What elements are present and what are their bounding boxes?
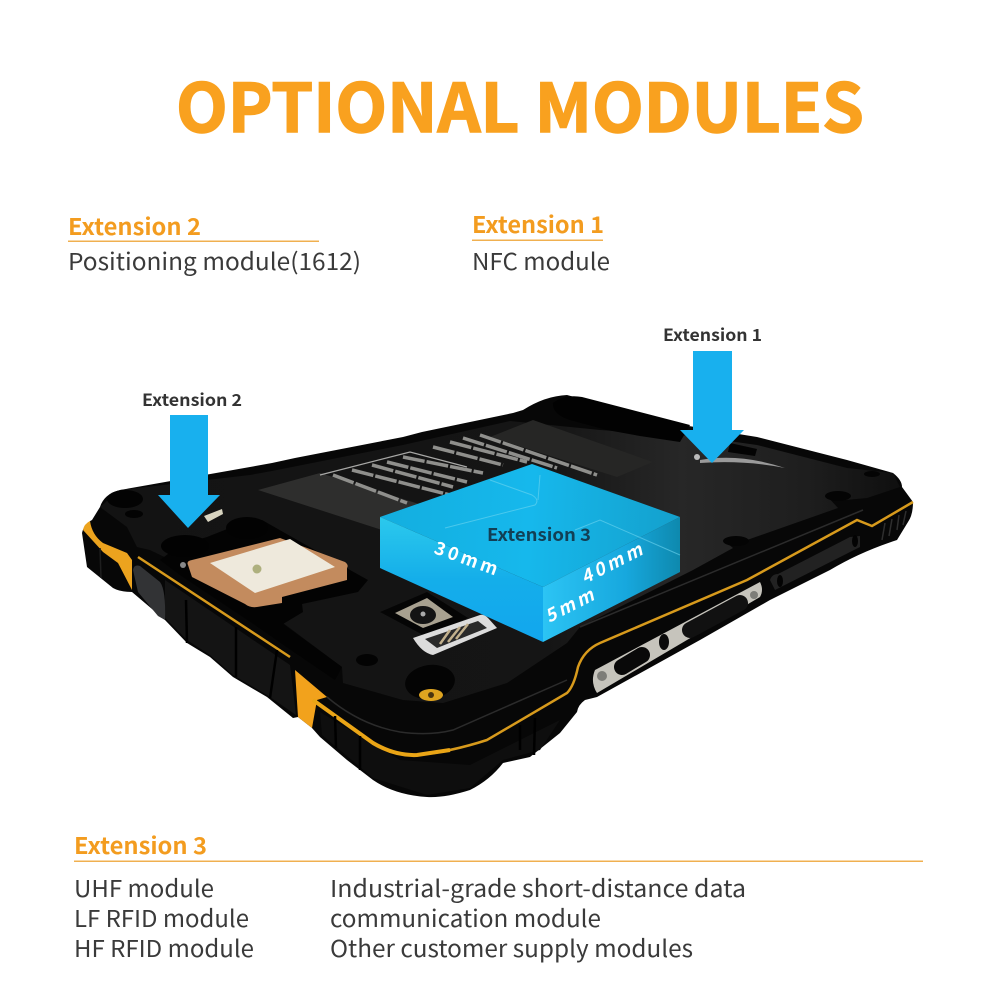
side power button xyxy=(133,566,165,620)
plate notches right xyxy=(825,491,851,501)
dimension 5mm: 5mm xyxy=(540,581,600,628)
block left face xyxy=(380,517,543,642)
text block: extension 2 xyxy=(68,208,361,277)
arrow: extension 2 xyxy=(142,387,242,528)
gps antenna module xyxy=(180,538,348,607)
sim card door xyxy=(770,535,860,590)
plate rim highlight xyxy=(327,510,863,734)
module description: communication module xyxy=(330,900,601,934)
arrow: extension 2: Extension 2 xyxy=(142,387,242,411)
orange bumper corner xyxy=(295,670,327,728)
metal tab near antenna xyxy=(204,509,223,522)
module list xyxy=(74,870,254,964)
orange bumper left xyxy=(83,521,132,590)
text block: extension 3 details xyxy=(74,827,923,964)
block right face xyxy=(543,517,680,642)
bumper ribs left xyxy=(100,548,101,578)
cavity around antenna xyxy=(160,520,368,680)
camera module xyxy=(380,592,468,636)
bottom screw xyxy=(403,662,457,702)
battery dark label panel xyxy=(490,420,653,477)
translucent module block: extension 3 xyxy=(380,464,680,642)
handle slot top xyxy=(553,396,690,442)
battery sticker textured panel xyxy=(258,473,470,530)
corner mounting holes xyxy=(107,490,143,508)
module list: HF RFID module xyxy=(74,930,254,964)
plate highlight streak xyxy=(700,458,785,468)
arrow: extension 1: Extension 1 xyxy=(663,322,762,346)
text block: extension 2: Positioning module(1612) xyxy=(68,243,361,277)
block label: Extension 3 xyxy=(487,522,591,547)
arrow: extension 1 xyxy=(663,322,762,463)
side ribs right xyxy=(882,511,906,540)
text block: extension 1 xyxy=(472,206,610,277)
tablet body silhouette xyxy=(82,395,913,797)
back plate xyxy=(100,421,900,703)
connector xyxy=(413,615,497,655)
text block: extension 1: NFC module xyxy=(472,243,610,277)
module description: Industrial-grade short-distance data xyxy=(330,870,746,904)
bumper ribs xyxy=(186,600,535,770)
module description: Other customer supply modules xyxy=(330,930,693,964)
side metal connector plate xyxy=(593,582,762,693)
battery sticker frame line xyxy=(320,452,467,475)
module list: UHF module xyxy=(74,870,214,904)
module description xyxy=(330,870,746,964)
yellow edge line xyxy=(138,502,913,755)
product photo: rugged tablet rear view xyxy=(82,395,913,797)
text block: extension 3 details: Extension 3 xyxy=(74,827,207,861)
battery sticker text lines xyxy=(333,435,597,503)
dimension 40mm: 40mm xyxy=(576,535,648,589)
block top face xyxy=(380,464,680,587)
title: OPTIONAL MODULES xyxy=(176,55,864,152)
lower bumper lighter panels xyxy=(165,580,296,715)
dimension 30mm: 30mm xyxy=(431,534,502,581)
module list: LF RFID module xyxy=(74,900,249,934)
text block: extension 2: Extension 2 xyxy=(68,208,201,242)
text block: extension 1: Extension 1 xyxy=(472,206,604,240)
